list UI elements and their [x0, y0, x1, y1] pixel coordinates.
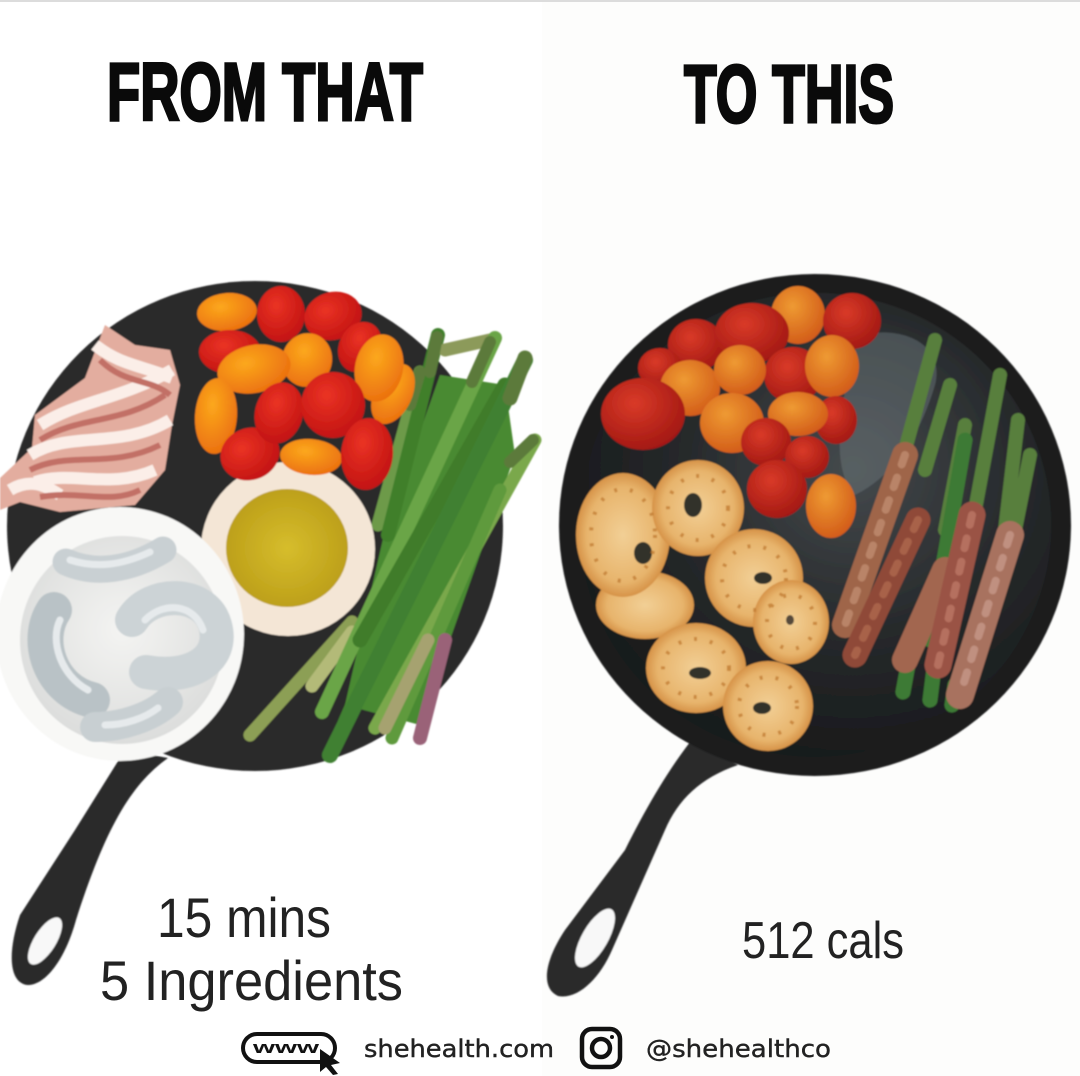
text: time and ingredients: 5 Ingredients: [100, 949, 403, 1012]
title: from that: FROM THAT: [107, 47, 423, 138]
text: calories: 512 cals: [742, 912, 904, 970]
photo: raw ingredients in pan: [0, 281, 535, 985]
photo: cooked meal in pan: [547, 274, 1071, 996]
bacon-wrapped asparagus: [845, 340, 1030, 705]
left pan: [7, 281, 503, 771]
icon: right pan handle: [547, 742, 738, 996]
raw shrimp: [45, 550, 217, 727]
title: to this: TO THIS: [684, 49, 894, 140]
icon: www cursor: www: [251, 1038, 320, 1057]
text: time and ingredients: [100, 886, 403, 1012]
icon: left pan handle: [12, 750, 168, 985]
bacon: [0, 325, 180, 512]
shrimp shell ridges: [591, 476, 815, 735]
right pan: [559, 274, 1071, 776]
bowl of olive oil: [201, 462, 375, 636]
icon: www cursor: [243, 1034, 340, 1075]
footer: website and social: [243, 1029, 831, 1075]
website: shehealth.com: [364, 1035, 554, 1063]
instagram handle: @shehealthco: [646, 1035, 831, 1063]
cooked shrimp: [576, 460, 829, 751]
roasted tomatoes: [601, 286, 881, 538]
raw asparagus: [250, 335, 535, 755]
pan oil sheen: [840, 332, 937, 495]
raw tomatoes: [192, 285, 424, 492]
text: time and ingredients: 15 mins: [157, 886, 331, 949]
icon: instagram: [582, 1029, 620, 1067]
bowl of raw shrimp: [0, 507, 244, 761]
